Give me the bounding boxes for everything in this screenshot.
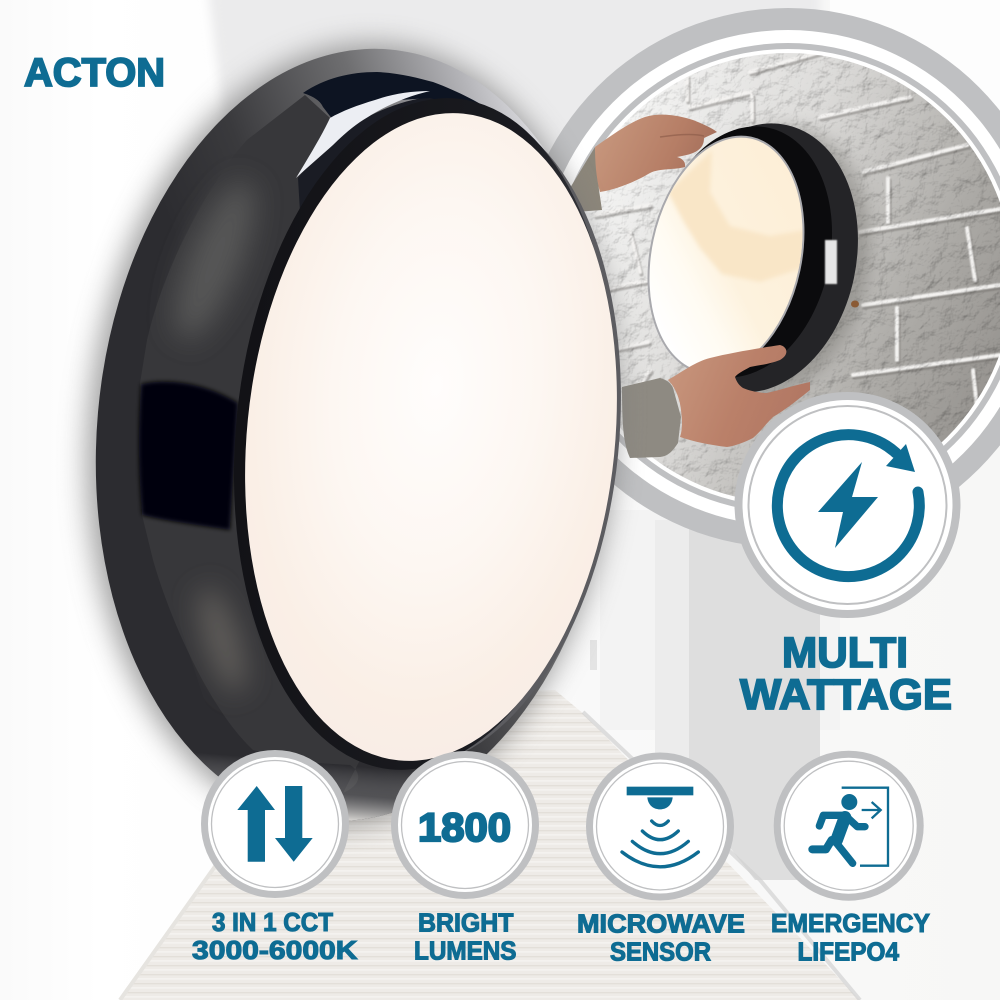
badge	[391, 751, 539, 899]
badge	[774, 751, 924, 901]
small lamp body	[689, 123, 859, 392]
label: 3000-6000K	[192, 937, 358, 965]
photo inset: installing the lamp on a brick wall	[518, 8, 1000, 548]
label	[577, 910, 745, 966]
photo scene	[560, 50, 1000, 510]
icon: sensor	[622, 787, 698, 867]
dark band above rim	[298, 97, 610, 300]
lumens number: 1800	[418, 806, 511, 850]
brick mortar	[595, 52, 1000, 410]
label	[192, 909, 358, 965]
label: EMERGENCY	[771, 910, 930, 938]
plaster texture	[589, 53, 1000, 494]
panel highlights	[159, 171, 271, 697]
inner panel	[140, 95, 500, 793]
label: MICROWAVE	[577, 910, 745, 938]
bottom fade	[64, 27, 648, 843]
multi wattage heading: MULTI	[782, 629, 908, 677]
gloss: black top	[303, 72, 502, 120]
feature: microwave sensor	[577, 752, 745, 966]
multi wattage heading	[740, 629, 952, 719]
feature: lumens	[391, 751, 539, 966]
gloss: white sliver	[296, 91, 430, 178]
small lamp shadow	[748, 118, 878, 393]
icon: up and down arrows	[237, 786, 313, 862]
lamp shadow	[55, 21, 649, 849]
main lamp	[55, 21, 651, 849]
badge	[201, 750, 349, 898]
badge	[586, 752, 734, 900]
feature: emergency	[771, 751, 930, 966]
label	[414, 910, 516, 966]
diffuser	[216, 95, 646, 779]
icon: running person and exit	[812, 788, 888, 866]
label	[771, 910, 930, 966]
label: LIFEPO4	[798, 938, 900, 966]
multi wattage badge	[734, 392, 960, 618]
top hand	[570, 115, 717, 212]
rim	[203, 80, 651, 788]
lamp body	[64, 27, 648, 843]
label: 3 IN 1 CCT	[212, 909, 333, 937]
small lamp diffuser	[648, 136, 804, 368]
bottom hand	[622, 345, 810, 458]
feature: CCT	[192, 750, 358, 965]
dark reflection	[139, 381, 238, 530]
label: LUMENS	[414, 938, 516, 966]
label: SENSOR	[610, 938, 711, 966]
photo ring	[518, 8, 1000, 548]
icon: power cycle	[777, 435, 919, 577]
label: BRIGHT	[418, 910, 514, 938]
multi wattage heading: WATTAGE	[740, 671, 952, 719]
title: ACTON	[24, 51, 165, 95]
